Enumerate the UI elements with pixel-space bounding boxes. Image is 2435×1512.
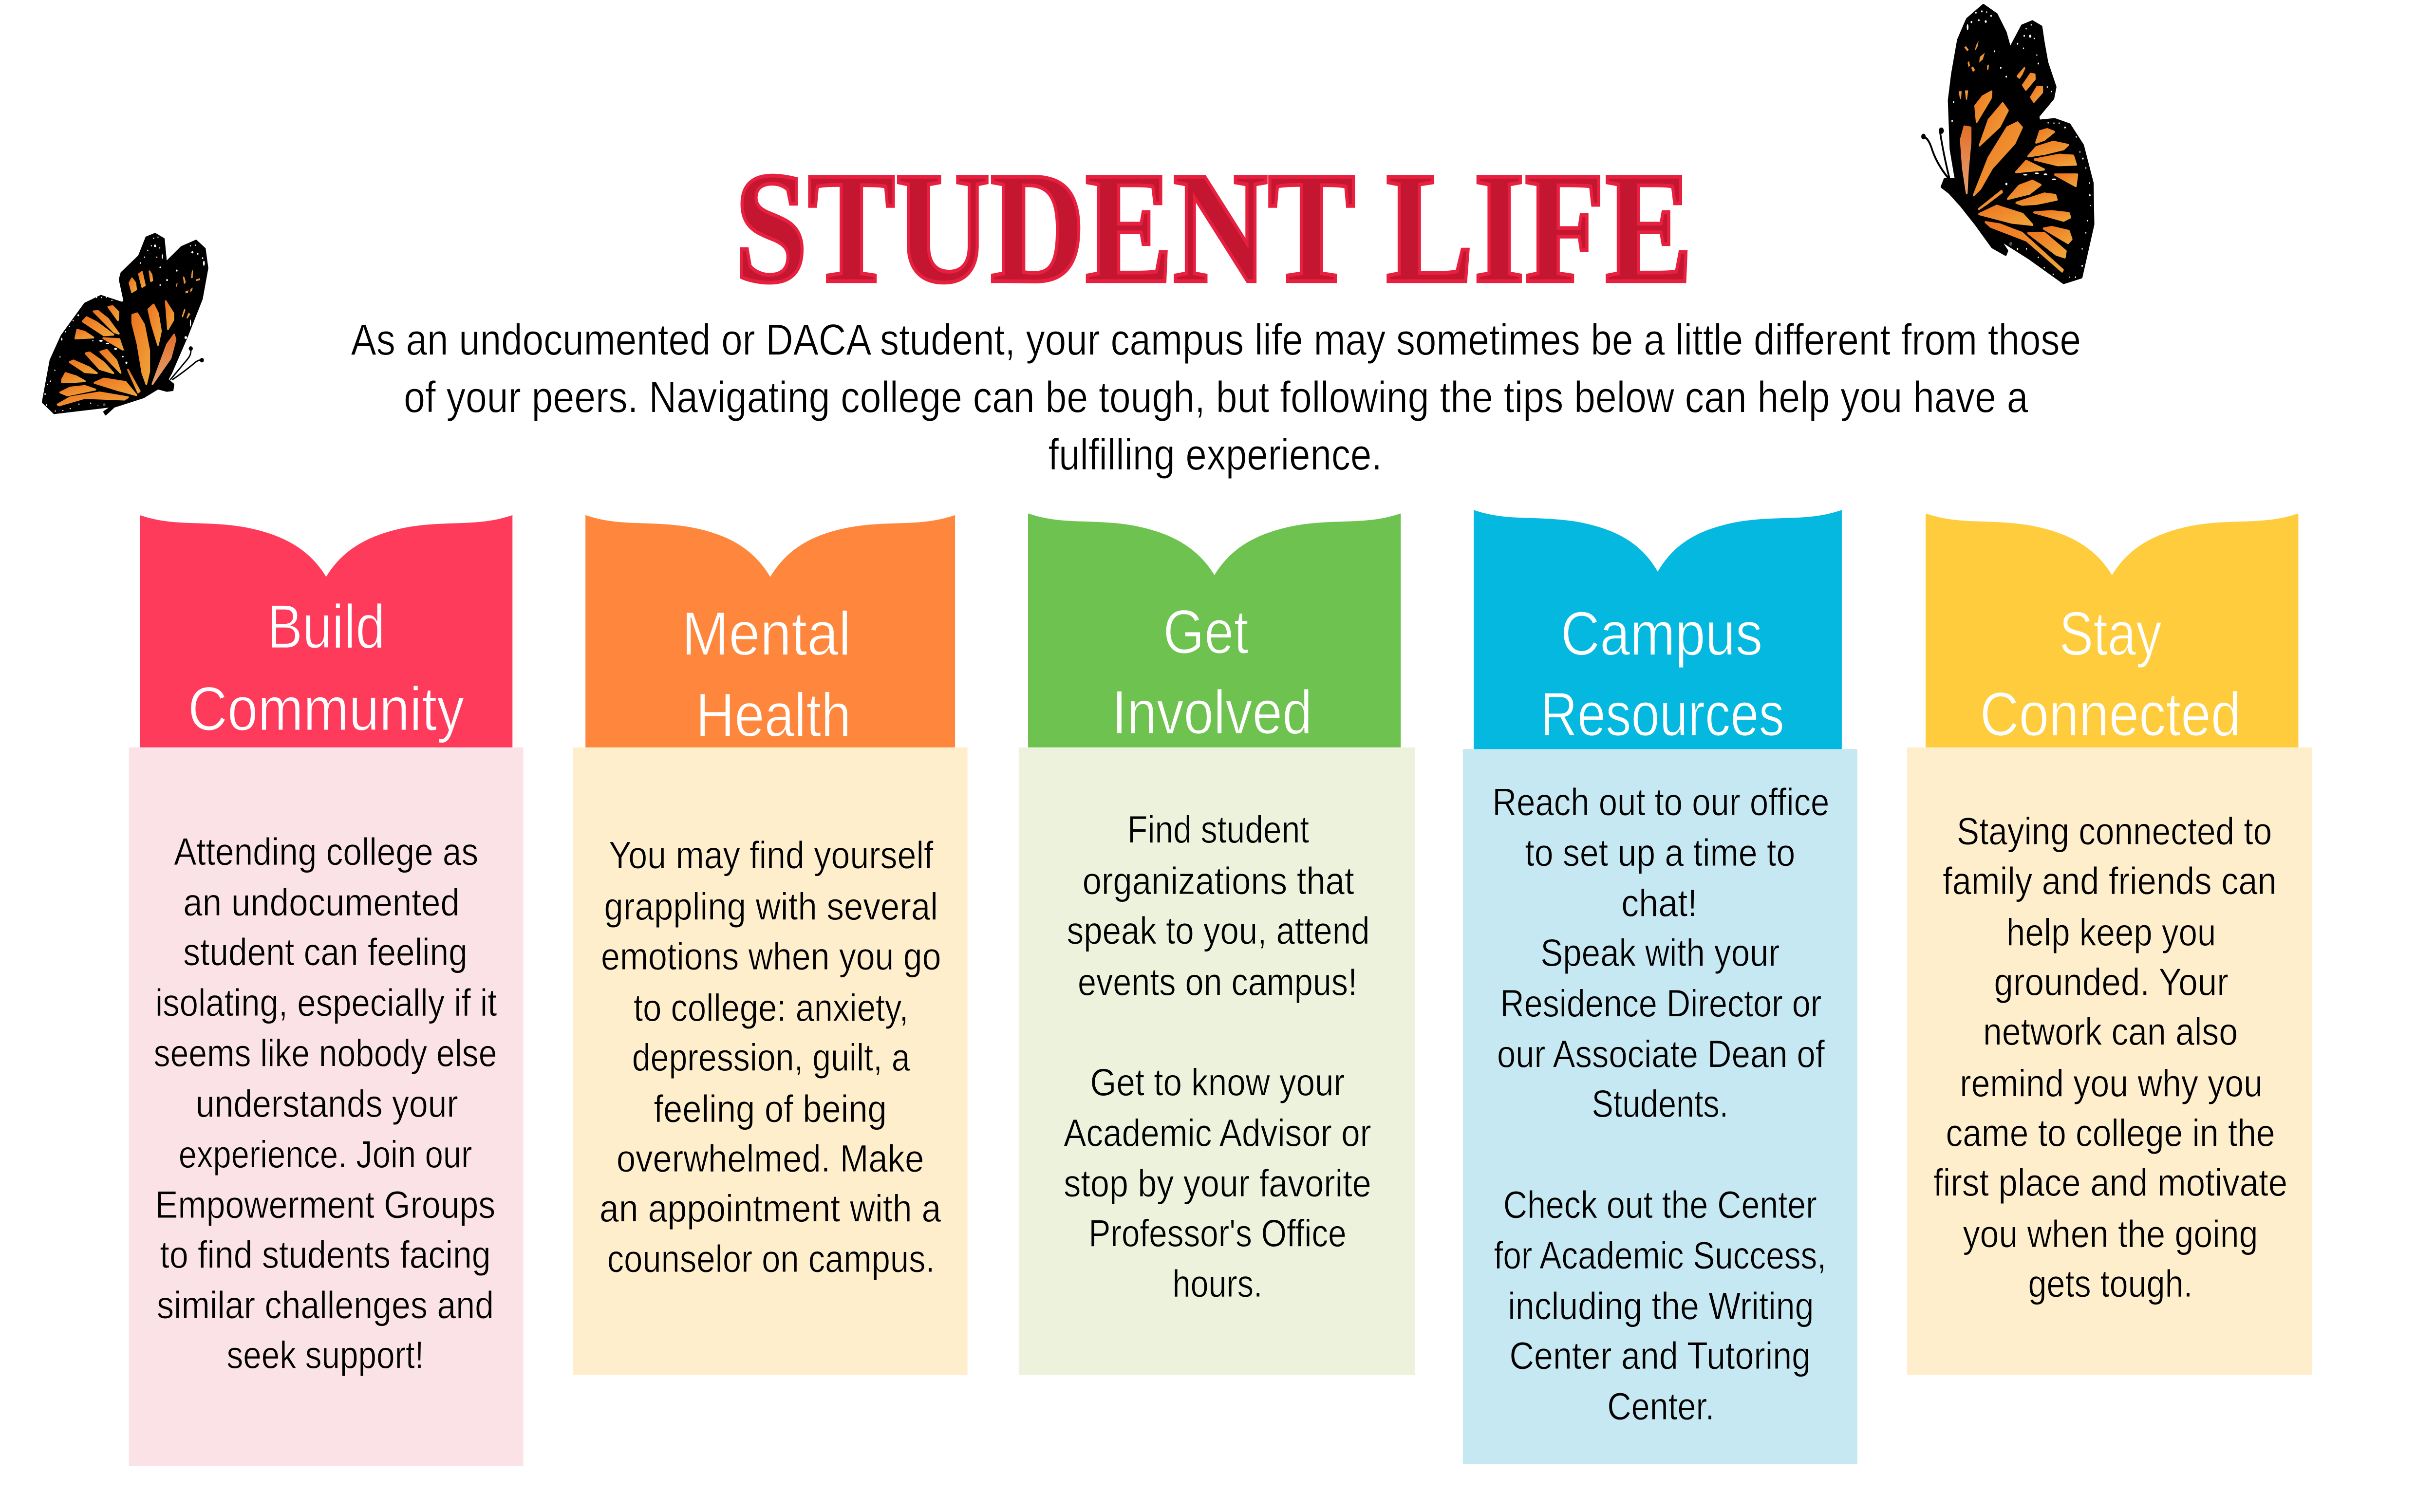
- panel: build community: [129, 515, 524, 1466]
- card body: build community: [129, 747, 524, 1466]
- card body: campus resources: chat!: [1621, 882, 1697, 925]
- card body: build community: to find students facing: [160, 1233, 491, 1276]
- card body: build community: isolating, especially if it: [155, 982, 497, 1025]
- card body: get involved: speak to you, attend: [1067, 910, 1370, 952]
- card body: campus resources: Reach out to our office: [1492, 781, 1829, 824]
- card body: campus resources: to set up a time to: [1525, 832, 1795, 875]
- card body: mental health: an appointment with a: [599, 1187, 941, 1230]
- header tab: stay connected: Connected: [1980, 680, 2241, 749]
- card body: get involved: stop by your favorite: [1064, 1162, 1371, 1205]
- card body: campus resources: Residence Director or: [1500, 982, 1821, 1025]
- card body: stay connected: family and friends can: [1943, 860, 2277, 903]
- card body: get involved: hours.: [1173, 1263, 1262, 1306]
- intro paragraph: [351, 316, 2081, 480]
- card body: campus resources: Students.: [1592, 1083, 1728, 1125]
- header tab: build community: [140, 515, 512, 747]
- card body: get involved: Find student: [1127, 808, 1309, 851]
- intro paragraph: As an undocumented or DACA student, your campus life may sometimes be a little different from those: [351, 316, 2081, 365]
- card body: mental health: counselor on campus.: [607, 1238, 935, 1281]
- card body: stay connected: first place and motivate: [1933, 1161, 2287, 1204]
- card body: build community: similar challenges and: [157, 1284, 494, 1327]
- card body: get involved: Get to know your: [1090, 1061, 1345, 1104]
- intro paragraph: of your peers. Navigating college can be tough, but following the tips below can help you have a: [404, 373, 2028, 422]
- card body: build community: understands your: [196, 1083, 458, 1125]
- intro paragraph: fulfilling experience.: [1048, 430, 1382, 480]
- card body: get involved: organizations that: [1083, 860, 1354, 903]
- header tab: stay connected: Stay: [2059, 599, 2162, 668]
- card body: campus resources: Check out the Center: [1503, 1184, 1817, 1227]
- card body: stay connected: grounded. Your: [1994, 961, 2229, 1004]
- card body: stay connected: network can also: [1983, 1010, 2238, 1054]
- card body: build community: Empowerment Groups: [155, 1184, 495, 1227]
- card body: build community: seems like nobody else: [154, 1032, 497, 1075]
- card body: mental health: to college: anxiety,: [634, 987, 908, 1029]
- header tab: mental health: Health: [696, 681, 851, 749]
- card body: get involved: events on campus!: [1078, 961, 1357, 1004]
- card body: get involved: [1019, 747, 1415, 1375]
- card body: build community: Attending college as: [174, 831, 478, 874]
- card body: mental health: [573, 747, 968, 1375]
- icon: butterfly top left: [43, 234, 207, 414]
- header tab: build community: Community: [188, 674, 465, 744]
- header tab: get involved: [1028, 513, 1401, 747]
- card body: mental health: feeling of being: [654, 1088, 887, 1131]
- header tab: get involved: Involved: [1112, 678, 1312, 747]
- header tab: mental health: [585, 515, 955, 749]
- card body: campus resources: [1463, 749, 1857, 1464]
- card body: stay connected: you when the going: [1963, 1213, 2258, 1256]
- card body: build community: experience. Join our: [179, 1133, 472, 1176]
- card body: campus resources: Speak with your: [1540, 932, 1779, 975]
- card body: mental health: emotions when you go: [601, 935, 941, 978]
- card body: get involved: Academic Advisor or: [1064, 1112, 1371, 1155]
- card body: build community: an undocumented: [183, 881, 460, 924]
- card body: mental health: depression, guilt, a: [632, 1036, 910, 1079]
- header tab: mental health: Mental: [682, 599, 851, 668]
- card body: campus resources: including the Writing: [1508, 1285, 1814, 1328]
- card body: campus resources: Center and Tutoring: [1509, 1335, 1811, 1378]
- card body: build community: student can feeling: [183, 931, 468, 974]
- header tab: build community: Build: [267, 592, 385, 661]
- card body: stay connected: remind you why you: [1960, 1062, 2263, 1105]
- header tab: stay connected: [1926, 513, 2298, 749]
- panel: get involved: [1019, 513, 1415, 1375]
- card body: campus resources: for Academic Success,: [1494, 1234, 1826, 1277]
- card body: stay connected: [1907, 747, 2312, 1375]
- header tab: campus resources: [1474, 510, 1842, 749]
- title: STUDENT LIFE: [734, 139, 1693, 316]
- card body: get involved: Professor's Office: [1088, 1212, 1347, 1255]
- card body: stay connected: Staying connected to: [1957, 810, 2272, 853]
- card body: campus resources: our Associate Dean of: [1497, 1033, 1825, 1076]
- panel: mental health: [573, 515, 968, 1375]
- card body: stay connected: gets tough.: [2028, 1263, 2193, 1306]
- header tab: get involved: Get: [1163, 597, 1249, 667]
- panel: campus resources: [1463, 510, 1857, 1464]
- card body: stay connected: came to college in the: [1946, 1112, 2275, 1155]
- card body: stay connected: help keep you: [2006, 911, 2216, 954]
- card body: campus resources: Center.: [1607, 1385, 1714, 1428]
- card body: mental health: overwhelmed. Make: [617, 1138, 924, 1180]
- card body: mental health: You may find yourself: [609, 834, 934, 877]
- card body: build community: seek support!: [227, 1334, 424, 1377]
- card body: mental health: grappling with several: [604, 885, 938, 929]
- header tab: campus resources: Campus: [1561, 599, 1762, 668]
- header tab: campus resources: Resources: [1540, 680, 1784, 749]
- icon: butterfly top right: [1921, 5, 2093, 283]
- panel: stay connected: [1907, 513, 2312, 1375]
